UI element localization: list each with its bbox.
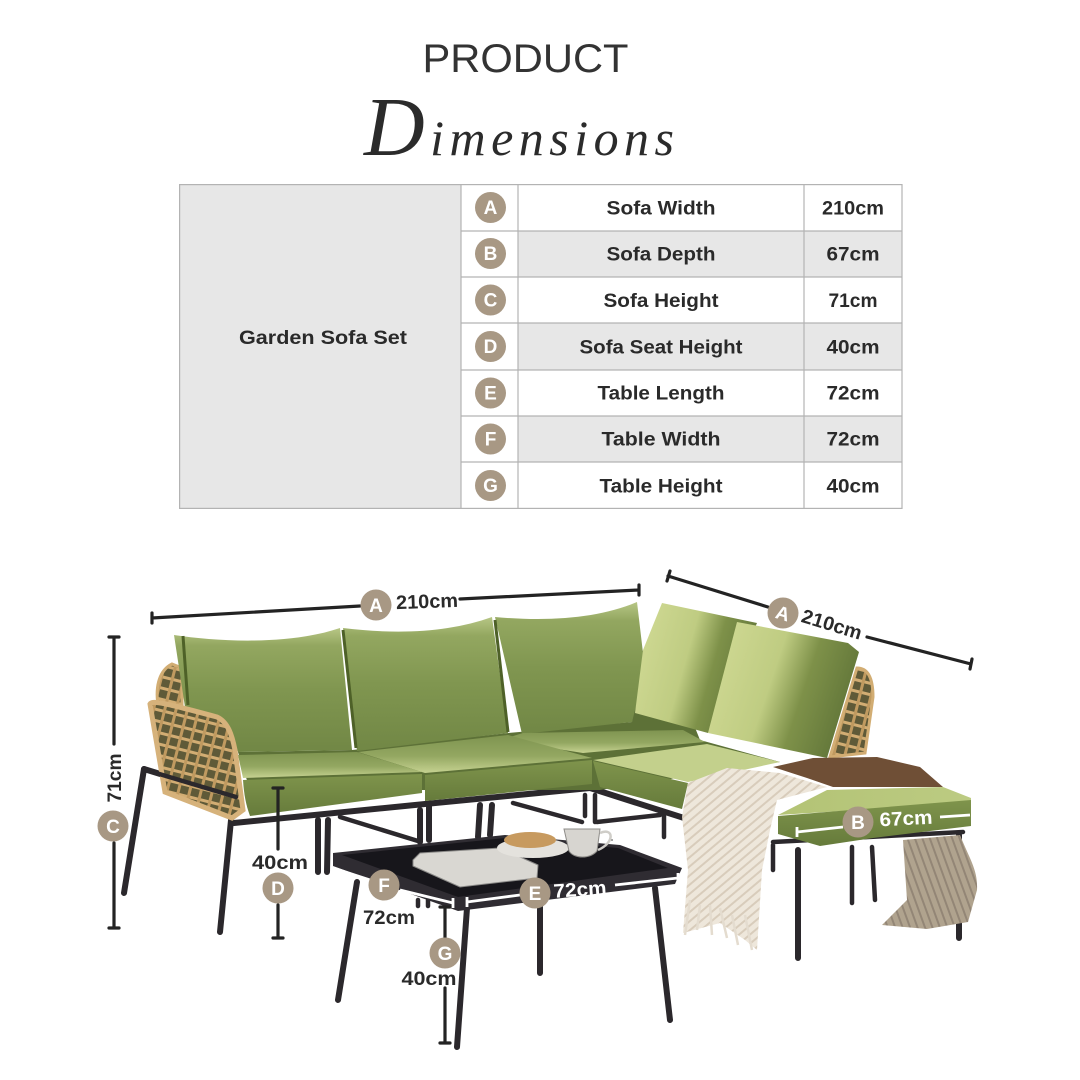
throw blanket cream [682,768,827,950]
dimensions table [180,185,902,508]
back cushion 4 [635,603,757,733]
dimension G: table height: G [438,944,452,965]
row G: Table Height [600,476,723,498]
dimension C: sofa height [98,637,128,928]
table: gray merged cell and row shading [180,185,902,508]
row D: D [484,337,497,358]
row A: Sofa Width [606,198,716,220]
dimension A: side sofa width [667,571,972,669]
throw blanket brown fold [773,757,943,787]
row B: B [484,244,497,265]
row C: C [484,290,498,312]
ottoman cushion [778,787,971,846]
rattan back panel right [830,668,873,757]
table label: Garden Sofa Set: Garden Sofa Set [239,327,408,349]
dimension G: table height [402,907,460,1043]
dimension A: front sofa width: 210cm [396,590,458,614]
row F: 72cm [826,428,880,450]
row G [475,470,880,501]
dimension C: sofa height: C [106,817,120,838]
back cushion 5 [708,622,859,758]
rattan arm left [150,702,243,818]
seat cushion 1 [238,752,422,816]
glass table top [333,835,682,911]
table rear feet [418,900,428,906]
row B: Sofa Depth [606,244,716,266]
dimension G: table height: 40cm [402,968,456,990]
rattan back panel left [157,664,182,705]
row F: F [485,430,496,450]
coffee cup [564,829,613,857]
row C [475,284,878,316]
row B [475,238,880,269]
row A [475,192,884,223]
dimension B: sofa depth: 67cm [879,807,933,831]
row G: G [483,476,498,497]
dimension A: front sofa width [152,585,639,623]
dimension B: sofa depth [797,806,970,838]
sofa frame and legs [124,769,963,958]
blanket fringe [685,900,752,950]
seat cushion 2 [358,735,592,801]
row E: 72cm [826,382,880,404]
row C: 71cm [828,290,878,312]
dimension E: table length [467,873,678,908]
dimension D: seat height: 40cm [252,852,308,874]
cushion seams [183,620,508,748]
dimension C: sofa height: 71cm [104,754,126,802]
back cushion 1 [174,628,352,752]
dimension E: table length: 72cm [553,877,607,903]
dimension D: seat height: D [271,879,285,900]
row E [475,378,880,408]
seat cushion 3 [500,730,705,753]
row E: E [484,384,497,404]
dimension D: seat height [252,788,308,938]
seat cushion 4 [593,744,780,809]
title: PRODUCT: PRODUCT [422,37,628,81]
arm metal bar [146,770,236,797]
dimension A: side sofa width: 210cm [799,605,865,645]
plate [497,838,569,858]
throw blanket hanging behind ottoman [882,835,977,929]
back cushion 3 [495,602,645,734]
dimension A: side sofa width: A [773,602,792,627]
row F [475,424,880,454]
illustration: coffee table [333,829,682,1047]
dimension F: table width [333,868,453,929]
row C: Sofa Height [604,290,719,312]
row E: Table Length [598,382,724,404]
dimension F: table width: F [378,876,390,897]
row A: 210cm [822,198,884,220]
row G: 40cm [826,476,880,498]
magazines [413,848,538,887]
row A: A [484,198,498,219]
title: Dimensions script: Dimensions [363,81,674,174]
row D: Sofa Seat Height [580,336,743,358]
dimension E: table length: E [529,884,541,905]
croissants [504,832,556,848]
table legs [338,882,670,1047]
row D: 40cm [826,336,880,358]
dark corner behind cushions [238,640,780,790]
dimension B: sofa depth: B [851,813,865,834]
back cushion 2 [343,617,508,751]
dimension F: table width: 72cm [363,907,415,929]
row F: Table Width [602,428,720,450]
illustration: corner sofa [124,602,977,958]
row D [475,331,880,362]
dimension A: front sofa width: A [369,596,383,617]
row B: 67cm [826,244,880,266]
